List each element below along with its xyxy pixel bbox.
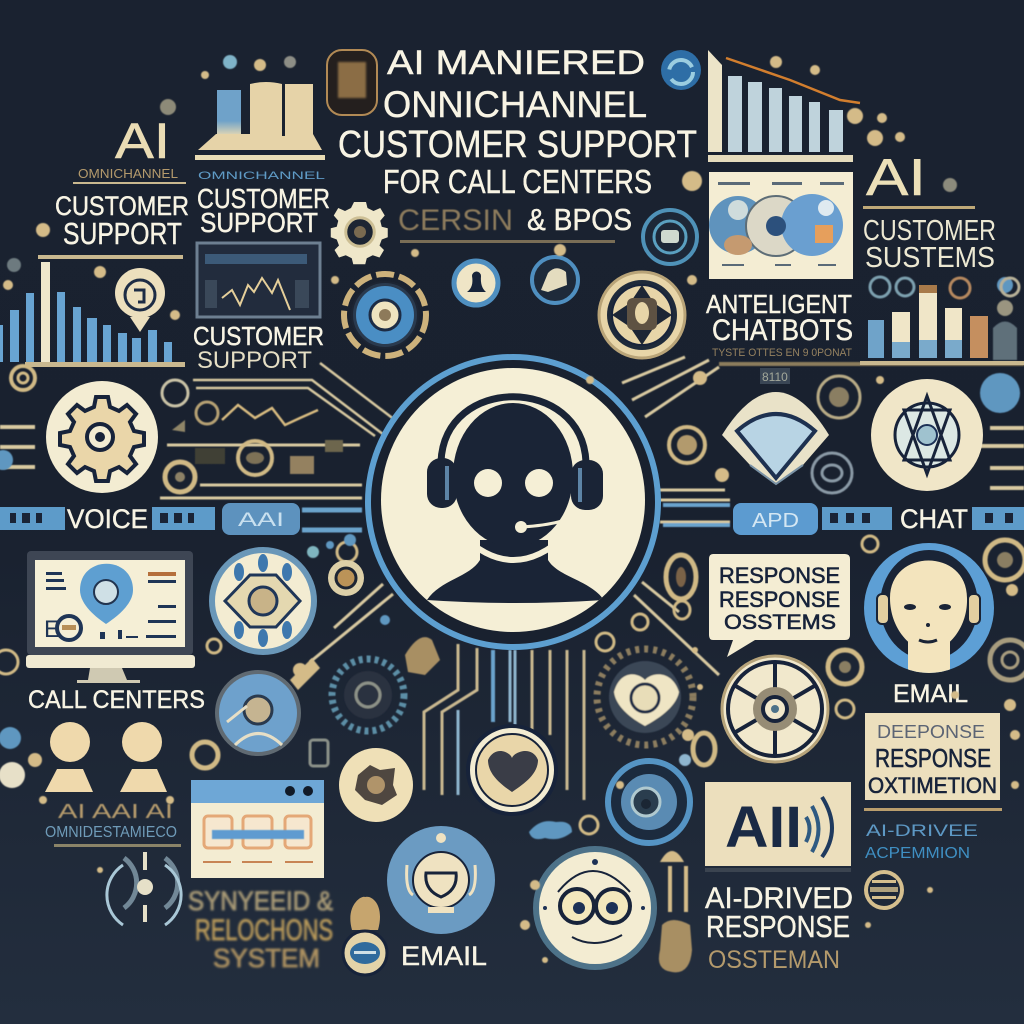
panel: response optimisation box: OXTIMETION (868, 773, 997, 798)
icon: swirl top (661, 50, 701, 90)
label: email bottom: EMAIL (401, 941, 487, 971)
panel: desktop monitor: E (44, 616, 60, 643)
microphone (515, 512, 578, 533)
icon: chat ring (643, 210, 697, 264)
title: AI MANIERED (387, 44, 645, 82)
icon: left gear (46, 381, 158, 493)
right heading: AI customer systems: AI (866, 149, 926, 207)
right heading: AI customer systems (863, 149, 996, 274)
left heading: AI customer support: CUSTOMER (55, 191, 189, 221)
pill: AAI: AAI (238, 510, 284, 531)
text: response systems dim block: SYNYEEID & (188, 886, 333, 916)
ear cups (427, 458, 603, 510)
panel: dashboard monitor (197, 243, 320, 317)
icon: puzzle badge (339, 748, 413, 822)
icon: profile ring (532, 257, 578, 303)
icon: crown badge (343, 897, 387, 975)
icon: face with glasses (536, 849, 654, 967)
headband (441, 397, 586, 462)
panel: response optimisation box: RESPONSE (875, 743, 991, 773)
icon: title cog (331, 202, 388, 264)
text: response systems dim block (188, 886, 333, 973)
chart doodle cluster (165, 402, 343, 492)
icon: swirl eye (115, 268, 165, 332)
label: intelligent chatbots: TYSTE OTTES EN 9 0PONAT (712, 347, 852, 359)
label: call centers: CALL CENTERS (28, 686, 205, 714)
icon: coin (328, 560, 364, 596)
band: chat: CHAT (900, 504, 968, 534)
pill: APD: APD (752, 510, 799, 532)
icon: wifi target (107, 852, 181, 925)
heading: customer support top: OMNICHANNEL (198, 170, 325, 182)
cream disc (381, 368, 645, 632)
icon: compass emblem (599, 272, 685, 358)
outer blue ring (368, 357, 658, 647)
panel: speech bubble response: OSSTEMS (724, 611, 836, 634)
label: AI-driven response: OSSTEMAN (708, 946, 840, 974)
icon: blue swirl ring (608, 761, 690, 843)
text: response systems dim block: SYSTEM (213, 943, 320, 973)
band: voice: VOICE (67, 504, 148, 534)
icon: location pin (80, 564, 133, 624)
chin gap (462, 535, 566, 560)
icon: eye badge blue (212, 550, 314, 652)
right heading: AI customer systems: SUSTEMS (865, 242, 995, 274)
left heading: AI customer support: AI (115, 113, 170, 169)
person doodle (993, 300, 1017, 360)
panel: AI voice box (705, 782, 851, 872)
left heading: AI customer support (55, 113, 189, 251)
text: response systems dim block: RELOCHONS (195, 914, 333, 947)
left heading: AI customer support: OMNICHANNEL (78, 166, 178, 181)
panel: speech bubble response: RESPONSE (719, 563, 840, 588)
text: AI-driven blue: AI-DRIVEE (866, 821, 978, 840)
bar chart: top right (708, 50, 860, 162)
icon: agent avatar (864, 543, 994, 680)
band: voice (0, 503, 300, 535)
title: FOR CALL CENTERS (383, 163, 652, 200)
icon: heart sun (597, 649, 693, 745)
circuit connector lines (0, 357, 1024, 800)
heading: customer support top: SUPPORT (200, 207, 318, 238)
icon: two people (45, 722, 167, 792)
text: left dim labels: AI AAI AI (58, 801, 173, 823)
heading: customer support middle: SUPPORT (197, 347, 312, 374)
title: CERSIN (398, 204, 513, 237)
panel: speech bubble response: RESPONSE (719, 587, 840, 612)
label: AI-driven response: AI-DRIVED (705, 882, 853, 915)
label: intelligent chatbots: CHATBOTS (712, 314, 853, 347)
heading: customer support top: CUSTOMER (197, 183, 330, 214)
icon: spoked wheel (722, 656, 828, 762)
eyes (474, 469, 553, 497)
title (338, 44, 697, 243)
panel: response optimisation box (864, 713, 1002, 811)
left heading: AI customer support: SUPPORT (63, 216, 182, 251)
band: chat (733, 503, 1024, 535)
label: email right: EMAIL (893, 680, 968, 708)
bar chart: left (0, 255, 185, 367)
pill: AAI (222, 503, 300, 535)
icon: building chart (195, 82, 325, 160)
icon: tan emblem (327, 50, 377, 115)
label: intelligent chatbots (706, 289, 853, 359)
icon: seal (864, 870, 904, 910)
pill: APD (733, 503, 818, 535)
label: AI-driven response (705, 882, 853, 974)
silhouette body (427, 540, 604, 603)
text: left dim labels: OMNIDESTAMIECO (45, 824, 177, 841)
icon: star circle (871, 379, 983, 491)
text: AI-driven blue (865, 821, 978, 862)
icon: bell ring (454, 261, 498, 305)
central agent icon (368, 357, 658, 647)
heading: customer support middle: CUSTOMER (193, 321, 324, 351)
label: AI-driven response: RESPONSE (706, 909, 850, 944)
panel: response optimisation box: DEEPONSE (877, 722, 985, 742)
right heading: AI customer systems: CUSTOMER (863, 215, 996, 247)
panel: browser window (191, 780, 324, 878)
bar chart: right (860, 285, 1024, 365)
icon: heart chat circle (468, 726, 556, 814)
heading: customer support middle (193, 321, 324, 374)
title: & BPOS (527, 202, 632, 237)
text: AI-driven blue: ACPEMMION (865, 845, 970, 862)
icon: lens badge blue (217, 672, 299, 754)
icon: blue gear emblem (344, 274, 426, 356)
text: left dim labels (45, 801, 181, 847)
heading: customer support top (197, 170, 330, 238)
panel: chatbot circles (709, 172, 853, 279)
title: CUSTOMER SUPPORT (338, 124, 697, 166)
label: intelligent chatbots: ANTELIGENT (706, 289, 852, 319)
icon: gem (722, 392, 829, 484)
head (453, 403, 573, 547)
small tag: 8110 (762, 370, 788, 384)
title: ONNICHANNEL (383, 84, 647, 125)
panel: speech bubble response (709, 554, 850, 657)
panel: AI voice box: AII (725, 795, 802, 860)
icon: robot badge (387, 826, 495, 934)
panel: desktop monitor (26, 551, 195, 683)
